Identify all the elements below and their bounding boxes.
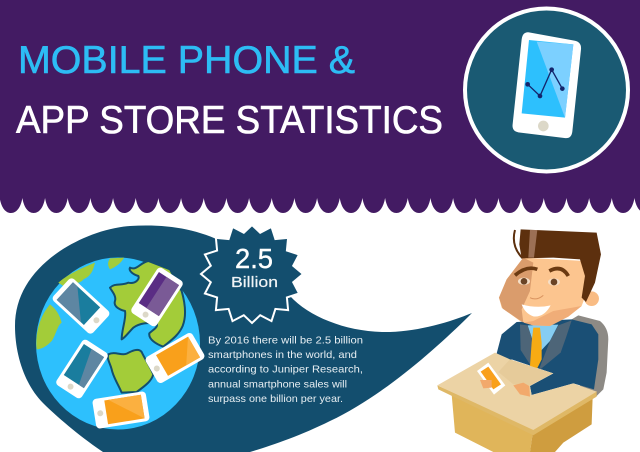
title line 1: MOBILE PHONE & xyxy=(18,39,355,82)
callout: 2.5 billion badge: 2.5 xyxy=(235,243,273,274)
title line 2: APP STORE STATISTICS xyxy=(16,99,443,142)
text block: description: By 2016 there will be 2.5 billion xyxy=(208,334,363,346)
hand with phone xyxy=(477,363,530,397)
illustration: businessman at desk xyxy=(437,229,608,452)
icon: phone in circle xyxy=(465,8,628,172)
header background with scalloped edge xyxy=(0,0,640,213)
phone: top left xyxy=(51,277,111,335)
speech bubble xyxy=(15,226,472,452)
continents xyxy=(36,258,185,393)
phone: orange right xyxy=(144,332,206,384)
phone: purple xyxy=(130,266,184,328)
chair xyxy=(572,315,608,398)
text block: description: according to Juniper Research, xyxy=(208,364,363,376)
callout: 2.5 billion badge xyxy=(201,225,303,323)
panel: header xyxy=(0,0,640,213)
globe xyxy=(36,258,200,430)
text block: description xyxy=(208,334,363,405)
illustration: globe with phones xyxy=(36,258,206,430)
phone: orange bottom xyxy=(92,391,150,429)
phone: lower left xyxy=(55,338,109,400)
text block: description: surpass one billion per year. xyxy=(208,393,343,405)
suit xyxy=(492,319,598,395)
text block: description: annual smartphone sales will xyxy=(208,378,347,390)
tie xyxy=(530,328,542,369)
text block: description: smartphones in the world, and xyxy=(208,349,357,361)
head xyxy=(499,229,601,326)
lapels xyxy=(520,324,533,365)
callout: 2.5 billion badge: Billion xyxy=(231,274,278,291)
desk xyxy=(437,353,597,452)
shirt xyxy=(528,325,558,350)
